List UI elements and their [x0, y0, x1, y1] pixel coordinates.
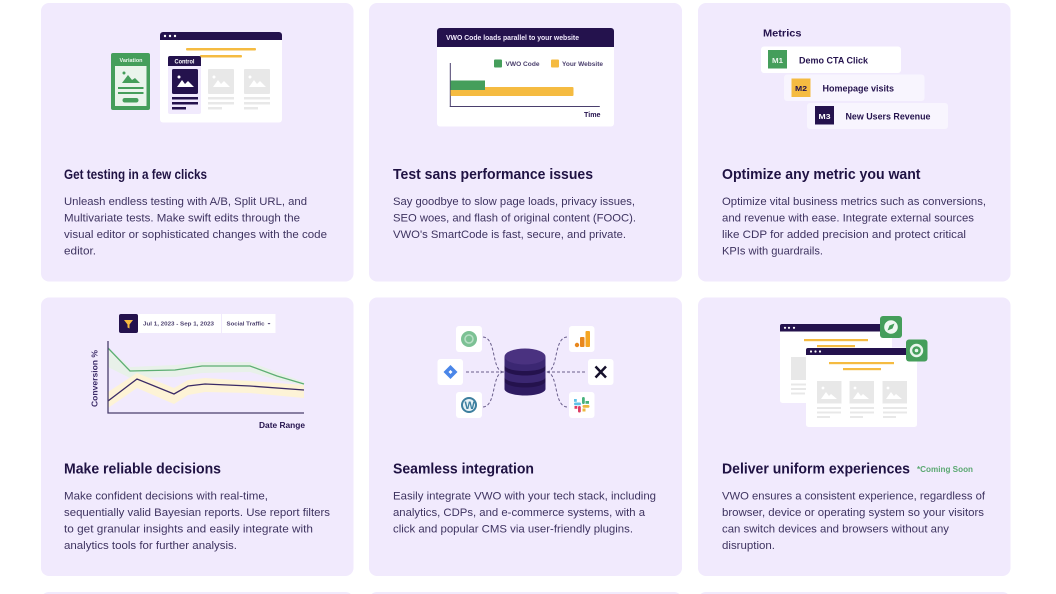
panel: next row left card [41, 592, 354, 594]
body text: analytics tools for further analysis. [64, 540, 237, 552]
panel: deliver uniform experiences [698, 298, 1010, 576]
illustration: metrics list: Homepage visits [822, 84, 894, 94]
illustration: conversion line chart [90, 314, 306, 430]
heading: Test sans performance issues [393, 167, 593, 183]
heading: Make reliable decisions [64, 462, 221, 478]
panel: make reliable decisions [41, 298, 354, 576]
coming soon tag: *Coming Soon [917, 465, 973, 474]
illustration: conversion line chart: Conversion % [90, 350, 100, 407]
body text: Optimize vital business metrics such as conversions, [722, 196, 986, 208]
illustration: variation and control page: Variation [120, 58, 143, 64]
illustration: metrics list: M2 [795, 84, 807, 93]
body text: sequentially valid Bayesian reports. Use report filters [64, 507, 330, 519]
body text: and revenue with ease. Integrate external sources [722, 212, 974, 224]
illustration: loading time chart: VWO Code [506, 61, 540, 68]
illustration: browser windows [780, 316, 928, 427]
icon: chrome badge [906, 340, 928, 362]
illustration: metrics list: M1 [772, 56, 783, 65]
illustration: loading time chart: VWO Code loads parallel to your website [446, 35, 579, 42]
body text [722, 490, 986, 552]
body text: visual editor or sophisticated changes with the code [64, 229, 327, 241]
illustration: conversion line chart: Jul 1, 2023 - Sep 1, 2023 [143, 322, 215, 328]
panel: seamless integration [369, 298, 682, 576]
body text: VWO ensures a consistent experience, regardless of [722, 490, 986, 502]
panel: optimize any metric [698, 3, 1010, 282]
heading: Seamless integration [393, 462, 534, 478]
illustration: metrics list: New Users Revenue [846, 112, 931, 122]
illustration: loading time chart: Time [584, 112, 601, 119]
illustration: variation and control page [111, 32, 282, 122]
illustration: conversion line chart: Social Traffic [226, 322, 265, 328]
body text [64, 490, 330, 552]
illustration: metrics list: Metrics [763, 28, 802, 40]
panel: get testing in a few clicks [41, 3, 354, 282]
body text [722, 196, 986, 258]
illustration: loading time chart [437, 28, 614, 126]
illustration: conversion line chart: Date Range [259, 421, 306, 430]
icon: wordpress [456, 392, 482, 418]
body text [393, 490, 656, 536]
body text: VWO's SmartCode is fast, secure, and private. [393, 229, 626, 241]
body text: analytics, CDPs, and e-commerce systems, with a [393, 507, 646, 519]
body text: browser, device or operating system so your visitors [722, 507, 984, 519]
body text: Multivariate tests. Make swift edits through the [64, 212, 300, 224]
body text [64, 196, 327, 258]
body text: can switch devices and browsers without any [722, 524, 949, 536]
illustration: metrics list: Demo CTA Click [799, 56, 868, 66]
icon: slack [569, 392, 594, 418]
icon: sync app [456, 326, 482, 352]
body text: like CDP for added precision and protect critical [722, 229, 966, 241]
panel: next row middle card [369, 592, 682, 594]
illustration: variation and control page: Control [174, 60, 195, 66]
panel: next row right card [698, 592, 1010, 594]
icon: safari badge [880, 316, 902, 338]
illustration: metrics list: M3 [818, 112, 830, 121]
illustration: metrics list [761, 28, 948, 129]
icon: jira [438, 359, 463, 385]
icon: analytics [569, 326, 594, 352]
illustration: loading time chart: Your Website [562, 61, 603, 68]
body text: SEO woes, and flash of original content (FOOC). [393, 212, 636, 224]
heading: Optimize any metric you want [722, 167, 921, 183]
heading: Get testing in a few clicks [64, 167, 207, 182]
body text: Say goodbye to slow page loads, privacy issues, [393, 196, 635, 208]
body text: to get granular insights and easily integrate with [64, 524, 313, 536]
body text: Make confident decisions with real-time, [64, 490, 268, 502]
illustration: integrations hub [438, 326, 614, 418]
panel: test sans performance issues [369, 3, 682, 282]
body text: disruption. [722, 540, 775, 552]
body text: editor. [64, 246, 96, 258]
body text: Unleash endless testing with A/B, Split URL, and [64, 196, 307, 208]
body text: KPIs with guardrails. [722, 246, 823, 258]
body text: click and popular CMS via user-friendly plugins. [393, 524, 633, 536]
body text: Easily integrate VWO with your tech stack, including [393, 490, 656, 502]
heading: Deliver uniform experiences [722, 462, 910, 478]
icon: x mark [588, 359, 614, 385]
icon: wordpress: W [464, 400, 476, 412]
body text [393, 196, 636, 241]
